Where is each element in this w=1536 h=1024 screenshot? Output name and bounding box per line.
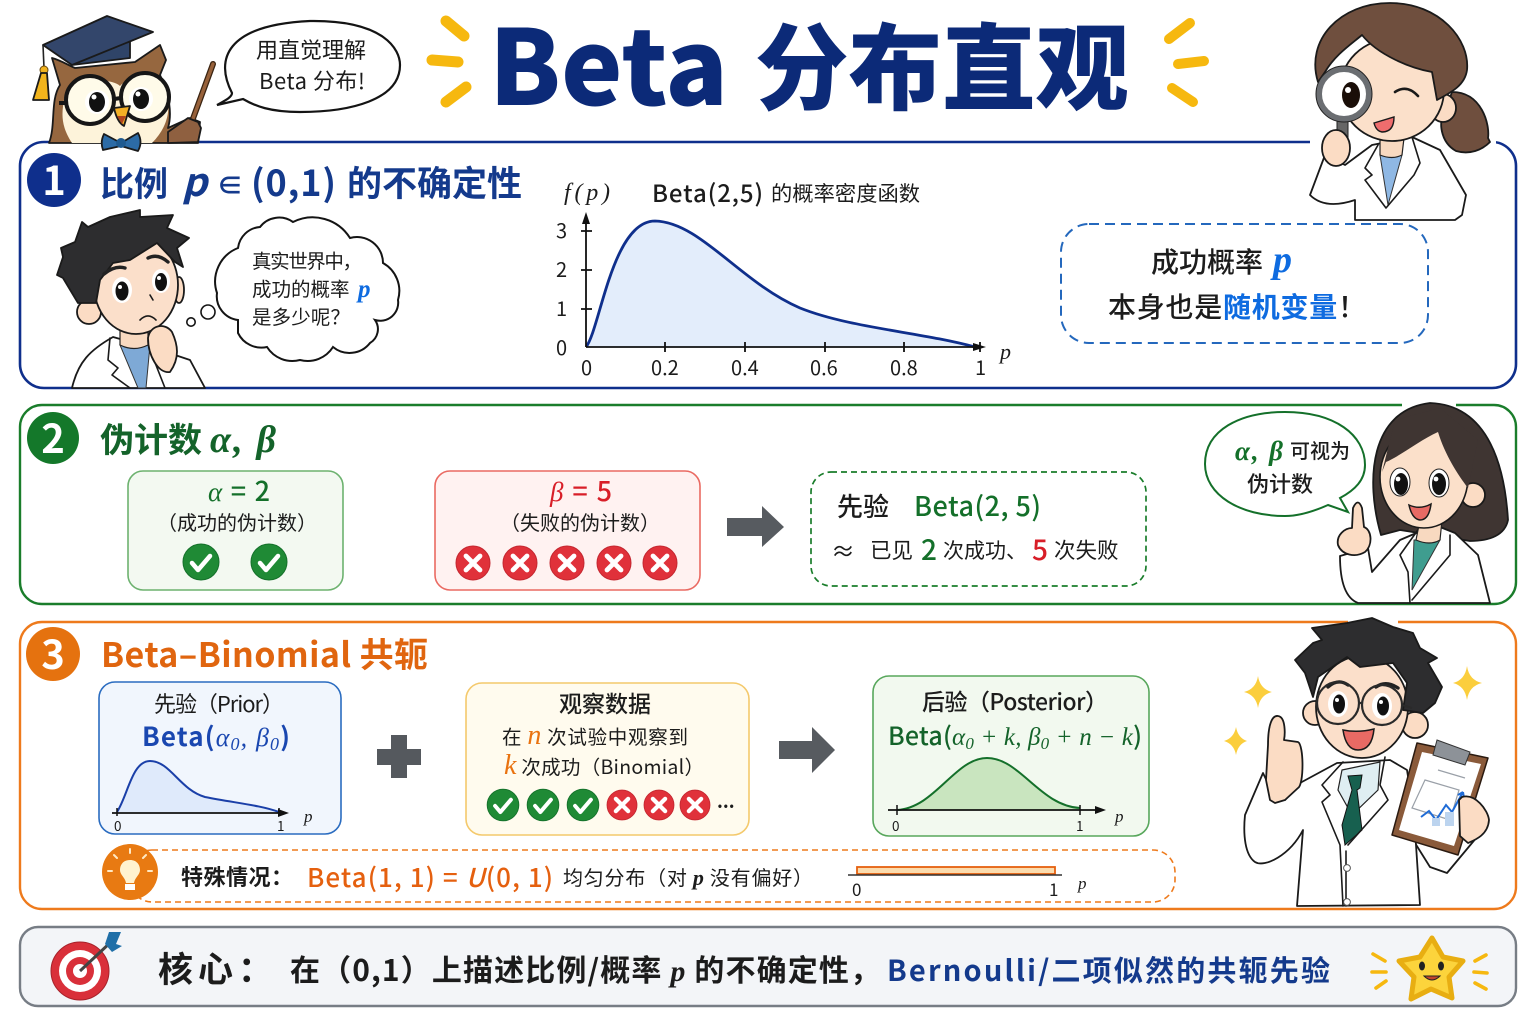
card: alpha successes: （成功的伪计数） [157, 507, 317, 536]
callout: prior interpretation: 5 [1032, 529, 1048, 569]
card: alpha successes [128, 470, 343, 590]
card: observed data [466, 683, 749, 835]
section 1 heading: p [182, 152, 210, 208]
section 2 heading: 伪计数 [100, 413, 202, 462]
section 1 heading: ∈ [217, 166, 243, 203]
mini chart: prior density: 0 [114, 815, 122, 835]
card: posterior [873, 676, 1149, 836]
icon: plus [377, 735, 421, 778]
title [489, 0, 1129, 135]
mini chart: uniform density: 0 [852, 876, 861, 901]
icon: thinking boy [57, 210, 205, 388]
chart: Beta(2,5) density: f(p) [564, 180, 610, 206]
speech bubble: pseudo counts: 可视为 [1290, 435, 1350, 464]
card: posterior: Beta(α [888, 717, 965, 753]
callout: special case uniform [130, 850, 1175, 902]
card: prior: 0 [270, 734, 279, 754]
card: prior: 0 [231, 734, 240, 754]
core takeaway text: Bernoulli/二项似然的共轭先验 [887, 948, 1330, 990]
card: prior: , β [241, 723, 269, 752]
section 1 heading: 的不确定性 [347, 156, 522, 207]
axis labels: 0.6 [810, 352, 838, 381]
axis labels: 1 [556, 293, 567, 322]
arrow: to prior meaning [727, 506, 784, 547]
callout: prior interpretation: 已见 [870, 534, 913, 565]
card: prior: ) [280, 717, 290, 754]
axis labels: 2 [556, 254, 567, 283]
arrow: to posterior [779, 727, 835, 773]
callout: success probability is random: 成功概率 [1151, 241, 1263, 281]
axis labels: 0.8 [890, 352, 918, 381]
callout: success probability is random [1061, 224, 1428, 343]
card: observed data: ... [717, 788, 735, 814]
chart title [652, 174, 920, 209]
thought bubble: boy: 成功的概率 [252, 273, 350, 302]
section 3 number badge [26, 623, 80, 681]
clipboard [1392, 740, 1488, 855]
speech bubble: owl: Beta 分布! [259, 64, 365, 96]
speech bubble: owl [217, 21, 400, 112]
callout: prior interpretation: 次成功、 [943, 535, 1027, 565]
icon: right title sparks [1169, 23, 1204, 102]
chart: Beta(2,5) density [556, 174, 1011, 381]
section 1 heading [100, 152, 522, 208]
card: posterior: ) [1133, 717, 1142, 753]
icon: girl pointing [1338, 400, 1508, 603]
mini chart: uniform density: p [1077, 874, 1086, 893]
callout: prior interpretation: 2 [921, 529, 937, 569]
panel: section 1 frame [20, 142, 1516, 388]
card: prior [99, 682, 341, 835]
core takeaway text [158, 942, 1330, 993]
mini chart: uniform density: 1 [1049, 876, 1058, 901]
speech bubble: pseudo counts [1205, 412, 1365, 516]
axis labels: 3 [556, 215, 567, 244]
callout: special case uniform: 均匀分布（对 p 没有偏好） [563, 862, 813, 891]
chart title: Beta(2,5) [652, 174, 763, 209]
mini chart: uniform density [848, 867, 1086, 901]
card: observed data: k 次成功（Binomial） [504, 750, 704, 781]
section 3 number badge: 3 [41, 623, 65, 681]
thought bubble: boy: 真实世界中， [252, 245, 362, 274]
card: posterior: 0 [1041, 734, 1050, 753]
section 2 number badge [27, 407, 79, 465]
callout: success probability is random: p [1270, 239, 1292, 281]
section 2 heading [100, 413, 277, 462]
icon: sparkles [1224, 666, 1482, 755]
card: alpha successes: α = 2 [208, 470, 270, 509]
axis labels: 0.2 [651, 352, 679, 381]
card: beta failures: β = 5 [549, 470, 612, 509]
axis labels: 0 [581, 352, 592, 381]
card: prior: Beta(α [142, 717, 229, 754]
callout: special case uniform: 特殊情况： [181, 860, 293, 892]
section 1 heading: (0,1) [251, 155, 336, 207]
axis labels [556, 215, 986, 381]
card: beta failures: （失败的伪计数） [500, 507, 660, 536]
curve area [586, 221, 975, 347]
axes and ticks [581, 218, 980, 352]
section 2 heading: α, β [210, 419, 277, 461]
icon: owl mascot with graduation cap [33, 16, 213, 151]
panel: section 2 frame [20, 405, 1516, 604]
speech bubble: pseudo counts: 伪计数 [1247, 467, 1313, 499]
callout: prior interpretation: ≈ [831, 532, 855, 567]
card: prior: 先验（Prior） [154, 687, 284, 719]
owl eyes and glasses [59, 73, 169, 124]
mini chart: posterior density: p [1114, 807, 1124, 826]
icon: girl with magnifying glass [1310, 3, 1496, 220]
card: posterior: 0 [965, 734, 974, 753]
callout: prior interpretation: 次失败 [1054, 534, 1119, 565]
mini chart: posterior density: 1 [1076, 815, 1084, 835]
icon: target with arrow [51, 932, 122, 1000]
icon: happy scientist with clipboard [1244, 618, 1489, 906]
icon: lightbulb badge [102, 844, 158, 900]
axis labels: 0.4 [731, 352, 759, 381]
icon: left title sparks [432, 21, 466, 102]
mini chart: posterior density: 0 [892, 815, 900, 835]
card: observed data: 在 n 次试验中观察到 [502, 720, 688, 751]
axis labels: 1 [975, 352, 986, 381]
callout: success probability is random: 本身也是随机变量！ [1108, 286, 1366, 326]
core takeaway text: 在（0,1）上描述比例/概率 p 的不确定性， [290, 946, 880, 990]
panel: core summary band [20, 927, 1516, 1006]
panel: section 3 frame [20, 622, 1516, 909]
mini chart: prior density: 1 [277, 815, 284, 835]
axis labels: 0 [556, 332, 567, 361]
mini chart: prior density: p [303, 807, 312, 826]
section 1 number badge: 1 [42, 149, 66, 207]
section 1 number badge [27, 149, 81, 207]
core takeaway text: 核心： [158, 942, 273, 993]
card: observed data: 观察数据 [559, 685, 651, 719]
callout: prior interpretation [811, 472, 1146, 586]
section 1 heading: 比例 [100, 157, 168, 206]
mini chart: prior density [112, 761, 312, 835]
section 2 number badge: 2 [41, 407, 65, 465]
card: posterior: + k, β [974, 724, 1041, 751]
speech bubble: owl: 用直觉理解 [256, 33, 366, 65]
thought bubble: boy: 是多少呢？ [252, 301, 350, 330]
callout: prior interpretation: 先验 [837, 487, 889, 524]
card: posterior: + n − k [1049, 724, 1134, 751]
thought bubble: boy [187, 217, 399, 361]
chart title: 的概率密度函数 [771, 177, 920, 208]
card: beta failures [435, 470, 700, 590]
callout: special case uniform: Beta(1, 1) = U(0, 1) [307, 858, 553, 895]
chart: Beta(2,5) density: p [998, 339, 1011, 364]
callout: prior interpretation: Beta(2, 5) [914, 485, 1041, 524]
icon: star face [1372, 938, 1487, 999]
mini chart: posterior density [888, 758, 1124, 835]
card: posterior: 后验（Posterior） [922, 683, 1108, 717]
speech bubble: pseudo counts: α, β [1235, 436, 1283, 466]
section 3 heading: Beta–Binomial 共轭 [101, 628, 428, 677]
thought bubble: boy: p [356, 276, 370, 303]
